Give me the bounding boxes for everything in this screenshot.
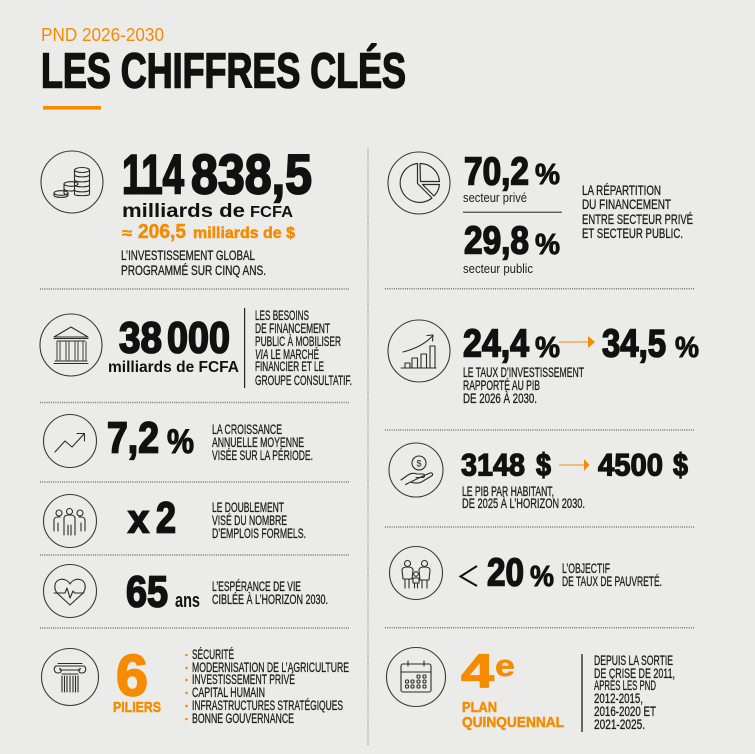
label: secteur privé [463,191,527,205]
bullet list: SÉCURITÉ [192,647,234,662]
unit: milliards de FCFA [108,359,239,376]
description: DE 2025 À L’HORIZON 2030. [462,496,585,511]
figure: 29,8 %: 29,8 [464,220,529,262]
label [462,699,564,731]
description: L’OBJECTIF [562,561,610,576]
icon: hand holding coin [389,443,443,497]
figure: x 2: x [128,498,149,542]
figure: 65 ans [126,568,200,616]
bullet list: INFRASTRUCTURES STRATÉGIQUES [192,698,343,713]
panel: taux de pauvreté [390,546,662,600]
figure: < 20 % [460,552,554,594]
figure: 70,2 %: 70,2 [464,150,529,194]
description: LE DOUBLEMENT [212,500,284,515]
figure: 7,2 %: 7,2 [107,414,159,462]
description: ANNUELLE MOYENNE [212,435,304,450]
description: DE 2026 À 2030. [463,391,537,406]
panel: investissement global [41,142,312,278]
panel: besoins de financement [40,308,352,388]
description: PROGRAMMÉ SUR CINQ ANS. [121,263,266,278]
label: QUINQUENNAL [462,714,564,731]
figure: 24,4 %: % [535,332,560,364]
equivalent in dollars: 206,5 [138,221,186,243]
description: LES BESOINS [255,308,309,323]
description: ENTRE SECTEUR PRIVÉ [582,212,693,227]
label: PLAN [462,699,497,716]
figure: x 2 [128,494,176,542]
description: GROUPE CONSULTATIF. [255,373,352,388]
description [212,422,313,463]
panel: taux d'investissement [388,320,699,406]
figure: 114 838,5 [122,142,312,206]
icon: heart with pulse [44,564,96,618]
description [562,561,662,589]
bullet list: INVESTISSEMENT PRIVÉ [192,672,295,687]
figure: 34,5 %: 34,5 [602,322,666,366]
equivalent in dollars: ≈ [122,225,132,242]
description: DE TAUX DE PAUVRETÉ. [562,574,662,589]
description: L’INVESTISSEMENT GLOBAL [121,248,255,263]
icon: ionic column [42,648,98,706]
figure: 24,4 %: 24,4 [463,322,530,366]
description: PUBLIC À MOBILISER [255,334,341,349]
panel: PIB par habitant [389,443,688,511]
description: APRÈS LES PND [594,678,656,693]
figure: 4e [461,644,515,697]
figure: 6 piliers [113,644,161,716]
description [212,579,328,607]
description: 2012-2015, [594,691,643,706]
figure: 38 000 [119,314,230,362]
icon: calendar [386,648,446,706]
figure: 6 piliers: PILIERS [113,699,161,716]
figure: 114 838,5: 114 [122,142,184,206]
label: secteur public [463,262,533,276]
figure: 7,2 %: % [167,423,194,461]
description: VIA LE MARCHÉ [255,347,319,362]
unit: FCFA [250,204,293,221]
unit [122,201,293,222]
separator [244,308,245,388]
description [582,183,693,241]
equivalent in dollars: milliards de $ [193,225,295,242]
description: VISÉE SUR LA PÉRIODE. [212,448,313,463]
description: LA CROISSANCE [212,422,282,437]
description: DE CRISE DE 2011, [594,666,675,681]
icon: institution building [40,314,102,376]
description: ET SECTEUR PUBLIC. [582,226,683,241]
icon: rising bar chart [388,320,450,382]
icon: pie chart [388,152,450,214]
description: LA RÉPARTITION [582,183,661,198]
description: DU FINANCEMENT [582,197,671,212]
figure: < 20 %: % [530,561,554,593]
icon: hand holding coin: $ [416,458,422,470]
bullet list: BONNE GOUVERNANCE [192,711,294,726]
description [121,248,266,278]
description: 2021-2025. [594,717,645,732]
panel: répartition du financement [388,150,693,276]
separator [581,654,583,732]
figure: 3148 $: 3148 [461,446,525,482]
bullet list: MODERNISATION DE L’AGRICULTURE [192,660,349,675]
figure: 70,2 %: % [535,159,560,191]
description: DE FINANCEMENT [255,321,330,336]
icon: group of people [44,494,96,548]
icon: growth line [44,414,96,468]
panel: espérance de vie [44,564,328,618]
title rule [43,106,101,110]
description: DEPUIS LA SORTIE [594,653,673,668]
description [212,500,306,541]
description: D’EMPLOIS FORMELS. [212,526,306,541]
figure: 6 piliers: 6 [116,644,148,708]
description: L’ESPÉRANCE DE VIE [212,579,301,594]
bullet list: CAPITAL HUMAIN [192,685,265,700]
figure: 4e: 4 [461,644,494,697]
figure: 114 838,5: 838,5 [191,142,312,206]
icon: family [390,546,442,600]
arrow [559,459,590,471]
figure: 34,5 %: % [675,332,699,364]
description: RAPPORTÉ AU PIB [463,378,540,393]
description [462,484,585,511]
panel: six piliers [42,644,349,726]
figure: 38 000: 38 [119,314,162,362]
figure: 65 ans: 65 [126,568,168,616]
subtitle: PND 2026-2030 [41,24,164,45]
description: CIBLÉE À L’HORIZON 2030. [212,592,328,607]
figure: < 20 %: 20 [487,552,524,594]
description: LE PIB PAR HABITANT, [462,484,554,499]
figure: 4500 $: $ [673,446,688,482]
bullet list [185,647,349,726]
title: LES CHIFFRES CLÉS [41,42,406,98]
figure: 3148 $: $ [536,446,551,482]
description [255,308,352,388]
figure: 38 000: 000 [167,314,230,362]
heading [41,24,406,110]
description: 2016-2020 ET [594,704,656,719]
description: LE TAUX D’INVESTISSEMENT [463,365,584,380]
description [594,653,675,732]
figure: 65 ans: ans [175,590,200,612]
description: FINANCIER ET LE [255,359,324,374]
panel: quatrième plan quinquennal [386,644,675,732]
equivalent in dollars [122,221,295,243]
description [463,365,584,406]
arrow [559,336,595,348]
icon: coins [41,151,103,213]
description: VISÉ DU NOMBRE [212,513,287,528]
figure: x 2: 2 [156,494,176,542]
panel: croissance [44,414,313,468]
figure: 4500 $: 4500 [598,446,663,482]
figure: 4e: e [495,648,515,683]
panel: emplois formels [44,494,306,548]
unit: milliards de [122,201,245,222]
figure: 29,8 %: % [535,229,560,261]
divider [463,212,562,213]
